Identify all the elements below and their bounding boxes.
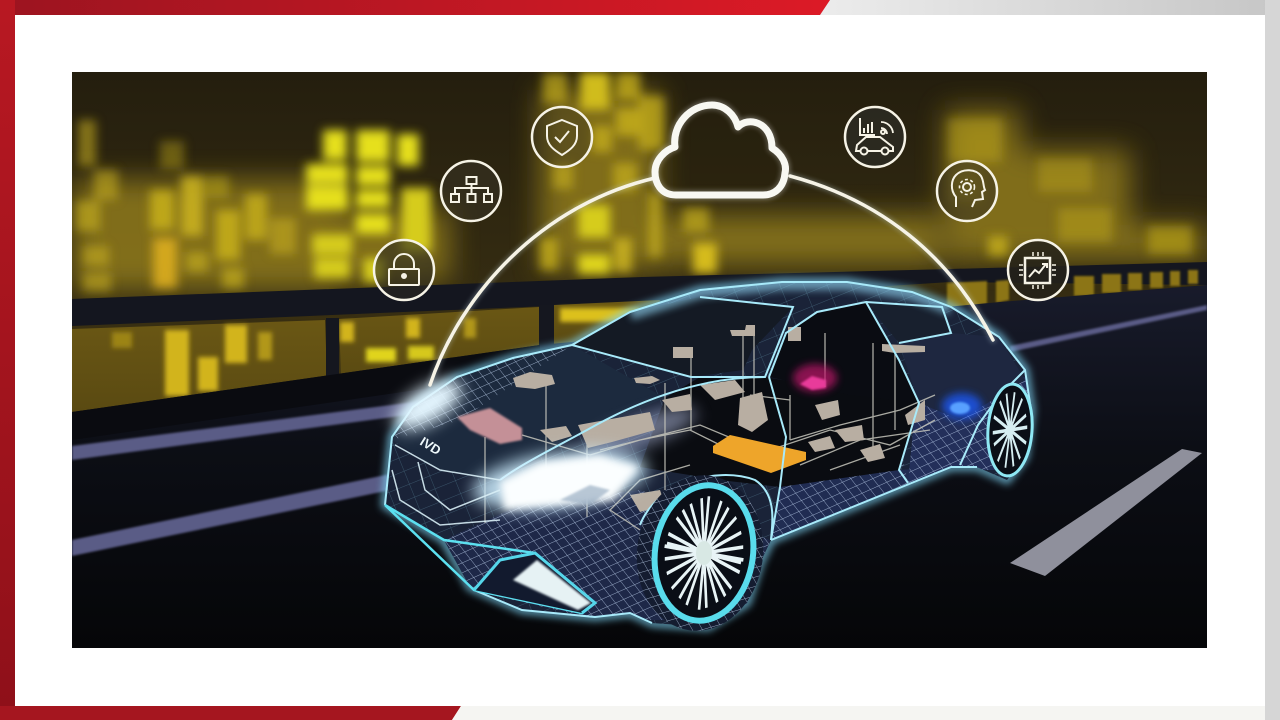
module: pink front unit bbox=[457, 408, 522, 444]
body mesh and panels bbox=[380, 275, 1040, 640]
front wheel bbox=[636, 475, 764, 631]
frame: top grey band bbox=[820, 0, 1280, 15]
headlight glow bbox=[387, 370, 651, 520]
roof glow bbox=[630, 282, 951, 312]
glow: magenta light bbox=[793, 364, 837, 392]
frame: bottom red band bbox=[0, 706, 461, 720]
frame: bottom light band bbox=[452, 706, 1265, 720]
icon: shield check bbox=[532, 107, 592, 167]
road shoulder dark band bbox=[72, 345, 540, 428]
icon: head with gear bbox=[937, 161, 997, 221]
night sky background bbox=[72, 72, 1207, 412]
body contour lines bbox=[385, 282, 1031, 623]
photo: connected car scene bbox=[72, 72, 1207, 648]
front bumper cyan trim bbox=[385, 505, 595, 613]
connection arc bbox=[430, 176, 993, 385]
lower panel lights bbox=[112, 308, 640, 396]
car badge: IVD bbox=[417, 434, 444, 458]
rear wheel bbox=[985, 383, 1035, 477]
cloud icon bbox=[655, 105, 785, 195]
roadside barrier rail bbox=[72, 262, 1207, 326]
frame: top red band bbox=[0, 0, 830, 15]
windshield bbox=[572, 297, 793, 377]
blurred yellow city lights bbox=[76, 72, 1192, 291]
rear quarter glass bbox=[899, 333, 1025, 420]
side window bbox=[769, 302, 919, 403]
cabin floor dark area bbox=[640, 377, 919, 487]
frame: right grey band bbox=[1265, 0, 1280, 720]
lower barrier amber panels bbox=[72, 300, 660, 412]
icon: padlock bbox=[374, 240, 434, 300]
fog lamp bbox=[474, 553, 595, 613]
network wiring bbox=[485, 333, 935, 530]
front grille bbox=[392, 445, 500, 525]
glass haze bbox=[578, 397, 702, 467]
internal modules bbox=[513, 325, 925, 512]
icon: connected car data bbox=[845, 107, 905, 167]
road lane lines bbox=[72, 305, 1207, 556]
icon: hierarchy bbox=[441, 161, 501, 221]
glow: blue light bbox=[942, 393, 982, 419]
car outer glow bbox=[385, 282, 1031, 627]
car: wireframe vehicle bbox=[380, 275, 1040, 640]
road surface bbox=[72, 285, 1207, 648]
barrier posts bbox=[326, 305, 554, 380]
module: orange battery bbox=[713, 435, 806, 473]
blurred city haze bbox=[72, 90, 1207, 290]
road dashed marking bbox=[1010, 449, 1202, 576]
frame: left red band bbox=[0, 0, 15, 720]
car body bbox=[385, 282, 1031, 627]
right barrier amber panels bbox=[947, 270, 1198, 310]
icon: chip with chart bbox=[1008, 240, 1068, 300]
rear window bbox=[868, 304, 950, 342]
